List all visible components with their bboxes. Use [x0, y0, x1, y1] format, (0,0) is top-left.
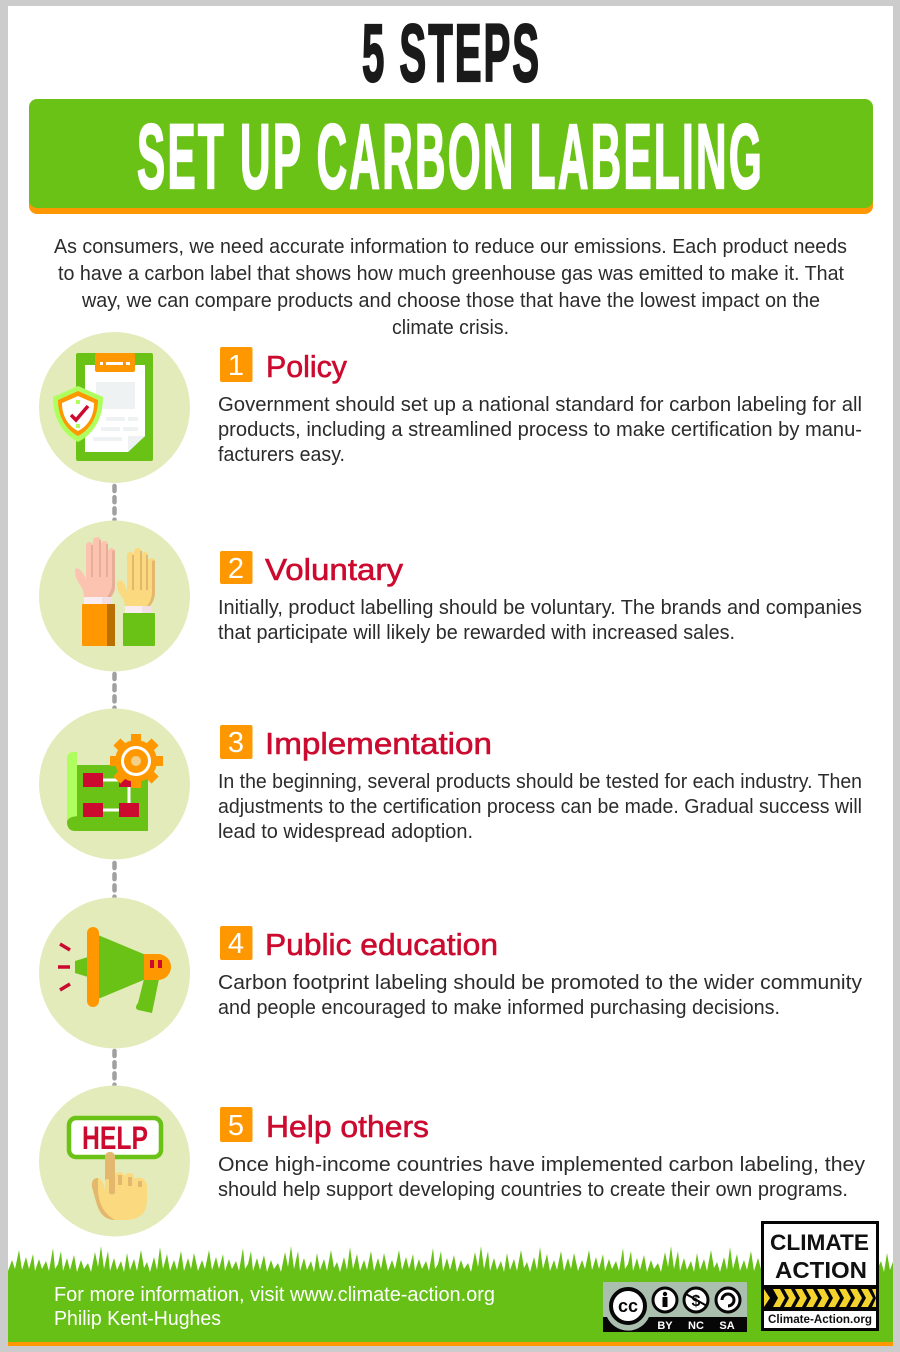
license badge: BY	[657, 1320, 673, 1332]
badge 1	[220, 347, 252, 382]
connector: step 3 to 4	[112, 863, 117, 897]
step 2 text: Initially, product labelling should be voluntary. The brands and companies	[218, 596, 862, 619]
icon: raised hands	[39, 520, 190, 672]
step 3 text: lead to widespread adoption.	[218, 820, 473, 843]
step 4 text	[218, 971, 863, 1019]
icon: plan with gear	[39, 708, 190, 860]
step 3	[218, 725, 862, 843]
climate action logo	[761, 1221, 879, 1331]
badge 1: 1	[228, 350, 244, 382]
step 2	[218, 551, 862, 644]
text: 5 STEPS	[362, 8, 541, 99]
heading: Policy: Policy	[266, 349, 347, 384]
step 4	[218, 926, 863, 1019]
step 5 text: should help support developing countries to create their own programs.	[218, 1178, 848, 1201]
step 3 text: adjustments to the certification process can be made. Gradual success will	[218, 795, 862, 818]
step 5 text: Once high-income countries have implemented carbon labeling, they	[218, 1153, 866, 1176]
step 2 text: that participate will likely be rewarded with increased sales.	[218, 621, 735, 644]
footer text	[54, 1283, 495, 1330]
connector: step 1 to 2	[112, 486, 117, 520]
footer text: For more information, visit www.climate-action.org	[54, 1283, 495, 1306]
step 3 text	[218, 770, 862, 843]
intro text: to have a carbon label that shows how much greenhouse gas was emitted to make it. That	[58, 262, 844, 285]
license badge: $	[692, 1293, 701, 1310]
intro text: As consumers, we need accurate information to reduce our emissions. Each product needs	[54, 235, 847, 258]
step 4 text: and people encouraged to make informed purchasing decisions.	[218, 996, 780, 1019]
step 3 text: In the beginning, several products should be tested for each industry. Then	[218, 770, 862, 793]
connector: step 4 to 5	[112, 1051, 117, 1086]
badge 4: 4	[228, 928, 244, 960]
heading: Voluntary: Voluntary	[265, 552, 404, 587]
step 1	[218, 347, 862, 466]
step 1 text	[218, 393, 862, 466]
badge 2	[220, 551, 252, 585]
heading: Public education: Public education	[265, 927, 498, 962]
footer grass band	[8, 1246, 893, 1346]
step 1 text: facturers easy.	[218, 443, 345, 466]
license badge: SA	[719, 1320, 735, 1332]
climate action logo: ACTION	[775, 1257, 867, 1283]
step 1 text: products, including a streamlined process to make certification by manu-	[218, 418, 862, 441]
icon: help button: HELP	[82, 1120, 148, 1156]
badge 3	[220, 725, 252, 759]
step 5 text	[218, 1153, 866, 1201]
icon: clipboard with shield	[39, 332, 190, 483]
intro text	[54, 235, 847, 339]
badge 4	[220, 926, 252, 960]
step 2 text	[218, 596, 862, 644]
badge 3: 3	[228, 727, 244, 759]
heading: Help others: Help others	[266, 1109, 429, 1144]
banner	[29, 99, 873, 214]
intro text: way, we can compare products and choose those that have the lowest impact on the	[81, 289, 820, 312]
icon: megaphone	[39, 898, 190, 1048]
icon: help button	[39, 1086, 190, 1236]
badge 5	[220, 1107, 252, 1142]
heading: Implementation: Implementation	[265, 726, 492, 761]
connector: step 2 to 3	[112, 674, 117, 708]
climate action logo: Climate-Action.org	[768, 1314, 872, 1326]
badge 2: 2	[228, 553, 244, 585]
step 1 text: Government should set up a national standard for carbon labeling for all	[218, 393, 862, 416]
footer text: Philip Kent-Hughes	[54, 1307, 221, 1330]
license badge: NC	[688, 1320, 704, 1332]
step 5	[218, 1107, 866, 1201]
license badge	[603, 1282, 747, 1332]
climate action logo: CLIMATE	[770, 1230, 869, 1255]
step 4 text: Carbon footprint labeling should be promoted to the wider community	[218, 971, 863, 994]
intro text: climate crisis.	[392, 316, 509, 339]
license badge: cc	[618, 1296, 638, 1316]
badge 5: 5	[228, 1110, 244, 1142]
